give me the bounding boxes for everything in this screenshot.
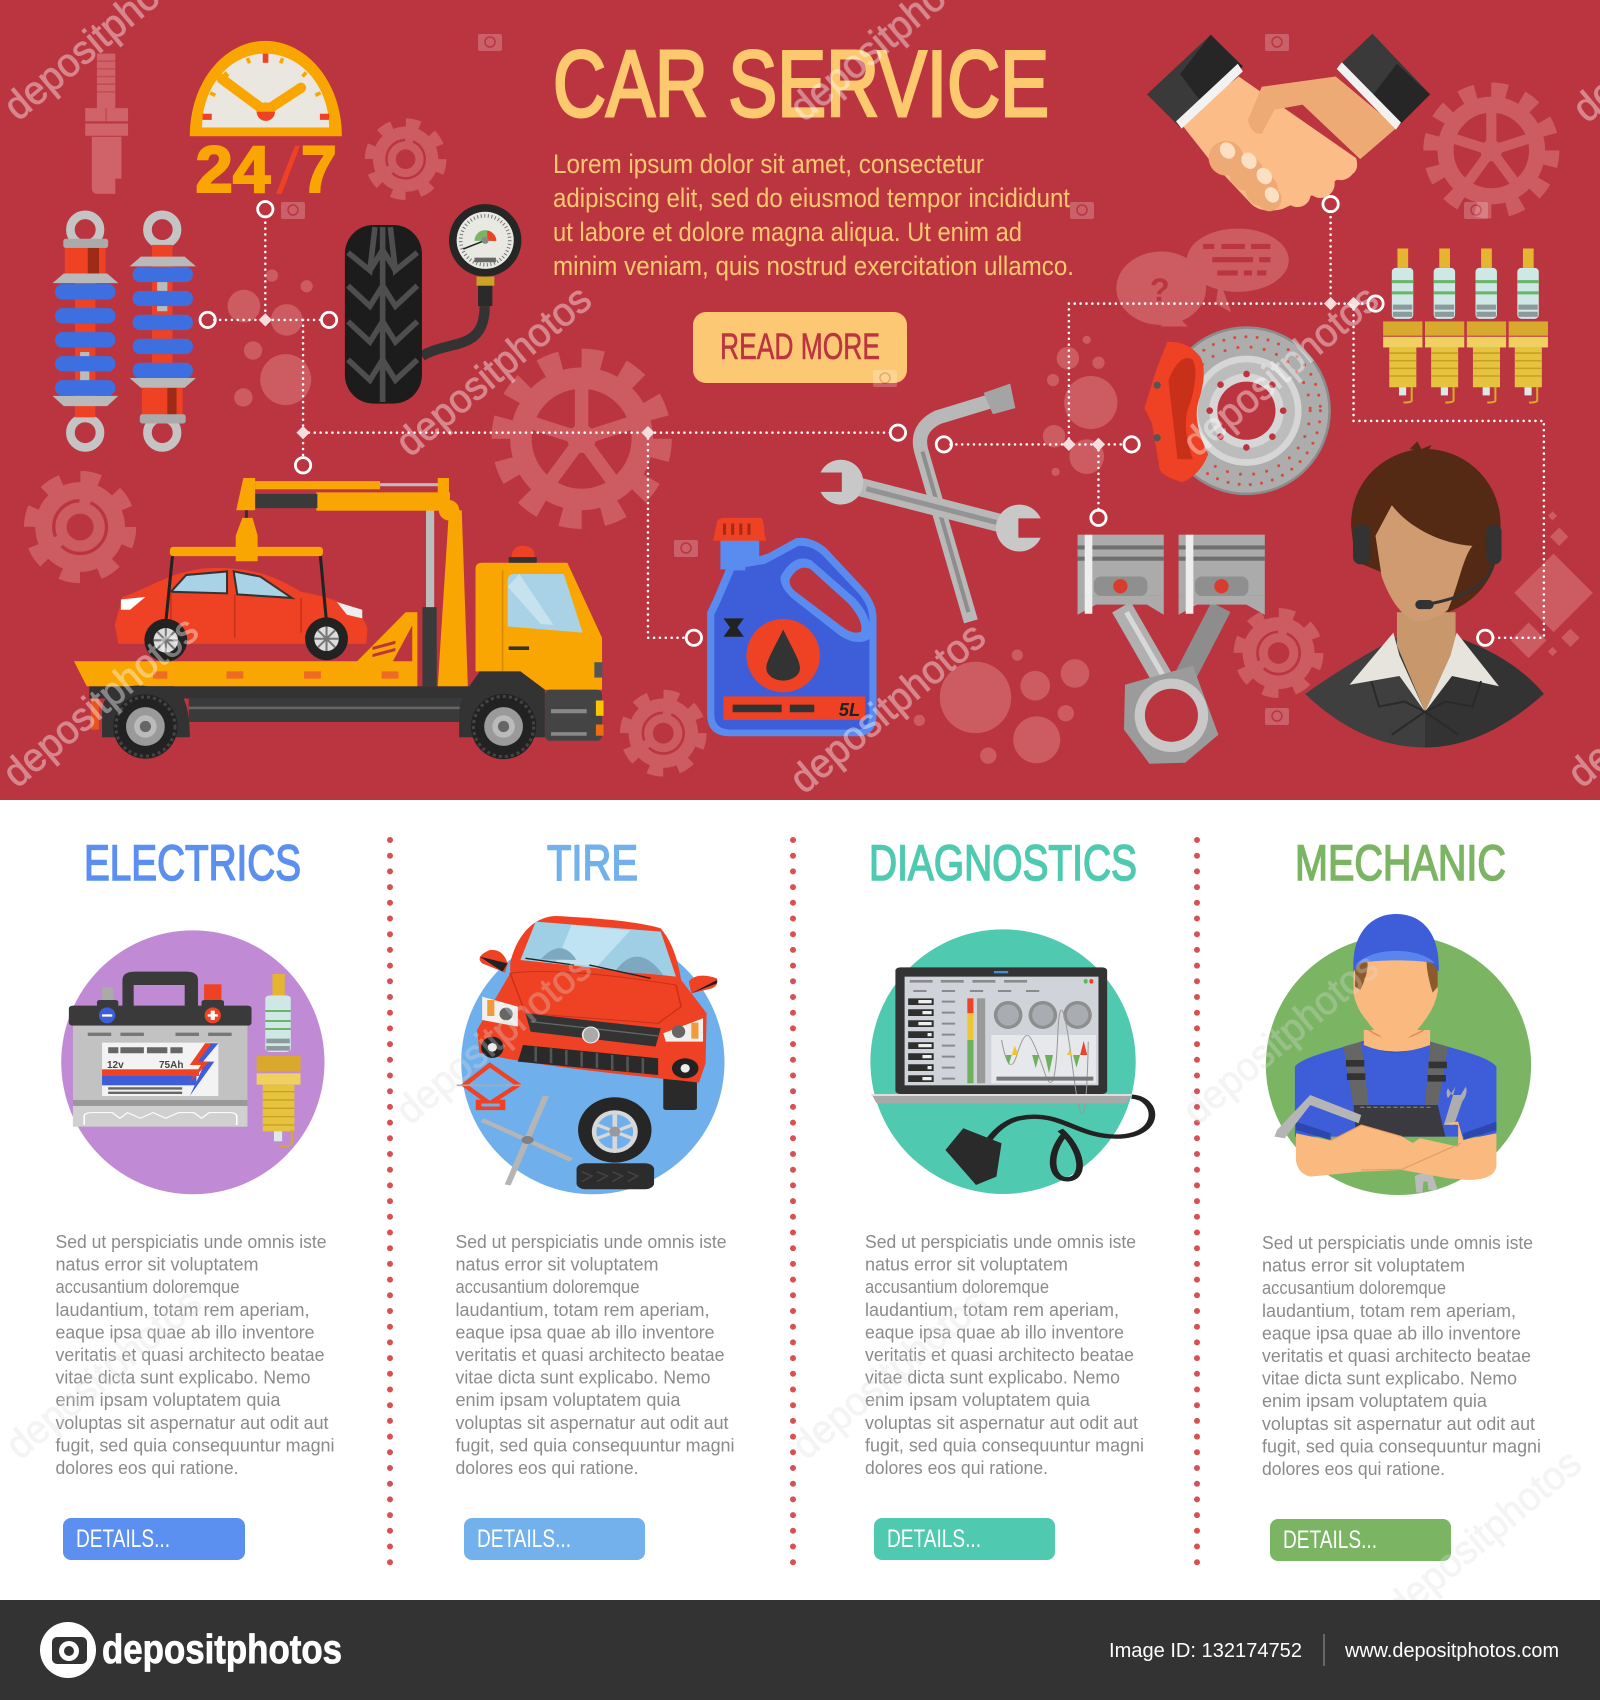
icon: shock absorbers: [53, 215, 196, 447]
electrics body text: eaque ipsa quae ab illo inventore: [56, 1322, 314, 1342]
electrics body text: dolores eos qui ratione.: [56, 1458, 238, 1478]
mechanic body text: Sed ut perspiciatis unde omnis iste: [1262, 1233, 1533, 1253]
battery rating labels: 75Ah: [159, 1060, 183, 1071]
mechanic body text: voluptas sit aspernatur aut odit aut: [1262, 1414, 1535, 1434]
tire body text: fugit, sed quia consequuntur magni: [456, 1435, 734, 1455]
icon: 24/7 clock: 24: [195, 133, 271, 207]
mechanic body text: dolores eos qui ratione.: [1262, 1459, 1445, 1479]
icon: handshake: [1147, 34, 1430, 211]
watermarks on the red panel: depositphotos: [1175, 277, 1387, 465]
faint watermarks on the white panel: depositphotos: [784, 1280, 996, 1468]
divider: [1324, 1634, 1325, 1666]
icon: tire and pressure gauge: [345, 204, 521, 404]
faint watermarks on the white panel: depositphotos: [0, 1280, 210, 1468]
faint watermarks on the white panel: [0, 945, 1590, 1629]
tire body text: Sed ut perspiciatis unde omnis iste: [456, 1232, 726, 1252]
icon: battery and spark plug: [61, 930, 324, 1194]
faint watermarks on the white panel: depositphotos: [1175, 945, 1387, 1133]
panel: dark footer: [0, 1600, 1600, 1700]
tire body text: voluptas sit aspernatur aut odit aut: [456, 1413, 728, 1433]
panel: white lower section: [0, 800, 1600, 1600]
electrics details button: DETAILS...: [76, 1525, 170, 1553]
diagnostics body text: accusantium doloremque: [865, 1277, 1049, 1297]
icon: 24/7 clock: [190, 41, 342, 207]
electrics body text: natus error sit voluptatem: [56, 1255, 258, 1275]
icon: call-centre operator: [1305, 441, 1544, 747]
mechanic body text: accusantium doloremque: [1262, 1278, 1446, 1298]
depositphotos logo: [40, 1622, 342, 1678]
diagnostics details button: [874, 1518, 1055, 1560]
faint watermarks on the white panel: depositphotos: [388, 945, 600, 1133]
intro paragraph: [553, 149, 1074, 281]
mechanic details button: DETAILS...: [1283, 1526, 1377, 1554]
diagnostics body text: natus error sit voluptatem: [865, 1255, 1068, 1275]
mechanic body text: enim ipsam voluptatem quia: [1262, 1391, 1488, 1411]
electrics body text: Sed ut perspiciatis unde omnis iste: [56, 1232, 326, 1252]
icon: diagnostic laptop and cable: [870, 929, 1152, 1194]
watermarks on the red panel: depositphotos: [388, 277, 600, 465]
battery rating labels: [107, 1060, 183, 1071]
heading: diagnostics: DIAGNOSTICS: [869, 835, 1137, 891]
tire body text: vitae dicta sunt explicabo. Nemo: [456, 1368, 710, 1388]
electrics body text: fugit, sed quia consequuntur magni: [56, 1435, 334, 1455]
tire body text: veritatis et quasi architecto beatae: [456, 1345, 724, 1365]
diagnostics details button: DETAILS...: [887, 1525, 981, 1553]
electrics body text: [56, 1232, 334, 1478]
mechanic body text: vitae dicta sunt explicabo. Nemo: [1262, 1369, 1517, 1389]
decorative gears, bubbles and faint icons: [31, 54, 1593, 771]
electrics body text: enim ipsam voluptatem quia: [56, 1390, 281, 1410]
battery rating labels: 12v: [107, 1060, 124, 1071]
decorative gears, bubbles and faint icons: ?: [1150, 271, 1170, 308]
diagnostics body text: [865, 1232, 1144, 1478]
icon: brake disc and caliper: [1144, 328, 1330, 494]
diagnostics body text: laudantium, totam rem aperiam,: [865, 1300, 1119, 1320]
icon: motor oil canister: [707, 518, 877, 736]
panel: red hero background: [0, 0, 1600, 800]
intro paragraph: adipiscing elit, sed do eiusmod tempor incididunt: [553, 183, 1070, 213]
mechanic body text: [1262, 1233, 1541, 1479]
tire body text: eaque ipsa quae ab illo inventore: [456, 1322, 714, 1342]
watermarks on the red panel: [0, 0, 1600, 802]
tire details button: [464, 1518, 645, 1560]
heading: electrics: ELECTRICS: [84, 835, 301, 891]
electrics body text: accusantium doloremque: [56, 1277, 240, 1297]
mechanic body text: natus error sit voluptatem: [1262, 1256, 1465, 1276]
depositphotos logo: depositphotos: [102, 1626, 342, 1672]
intro paragraph: minim veniam, quis nostrud exercitation ullamco.: [553, 251, 1074, 281]
icon: four spark plugs: [1383, 248, 1548, 403]
electrics body text: veritatis et quasi architecto beatae: [56, 1345, 324, 1365]
tire body text: laudantium, totam rem aperiam,: [456, 1300, 710, 1320]
mechanic details button: [1270, 1519, 1451, 1561]
icon: motor oil canister: 5L: [839, 699, 860, 720]
dotted column separators: [390, 840, 1197, 1568]
watermarks on the red panel: depositphotos: [782, 614, 994, 802]
diagnostics body text: dolores eos qui ratione.: [865, 1458, 1048, 1478]
intro paragraph: ut labore et dolore magna aliqua. Ut enim ad: [553, 217, 1022, 247]
read more button: READ MORE: [720, 326, 880, 367]
tire body text: natus error sit voluptatem: [456, 1255, 658, 1275]
electrics details button: [63, 1518, 245, 1560]
tire details button: DETAILS...: [477, 1525, 571, 1553]
mechanic body text: fugit, sed quia consequuntur magni: [1262, 1436, 1541, 1456]
mechanic body text: eaque ipsa quae ab illo inventore: [1262, 1323, 1521, 1343]
diagnostics body text: vitae dicta sunt explicabo. Nemo: [865, 1368, 1120, 1388]
icon: 24/7 clock: 7: [301, 133, 337, 207]
electrics body text: laudantium, totam rem aperiam,: [56, 1300, 310, 1320]
icon: tow truck with car: [74, 478, 604, 759]
tire body text: enim ipsam voluptatem quia: [456, 1390, 681, 1410]
mechanic body text: veritatis et quasi architecto beatae: [1262, 1346, 1531, 1366]
electrics body text: voluptas sit aspernatur aut odit aut: [56, 1413, 328, 1433]
tire body text: dolores eos qui ratione.: [456, 1458, 638, 1478]
icon: car on jack with tire: [457, 916, 724, 1194]
title: CAR SERVICE: [553, 31, 1049, 136]
watermarks on the red panel: depositphotos: [0, 608, 207, 796]
faint watermarks on the white panel: depositphotos: [1378, 1441, 1590, 1629]
image id: Image ID: 132174752: [1109, 1640, 1302, 1662]
read more button: [693, 312, 907, 383]
diagnostics body text: veritatis et quasi architecto beatae: [865, 1345, 1134, 1365]
intro paragraph: Lorem ipsum dolor sit amet, consectetur: [553, 149, 984, 179]
heading: tire: TIRE: [547, 835, 638, 891]
diagnostics body text: voluptas sit aspernatur aut odit aut: [865, 1413, 1138, 1433]
dotted connector network: [200, 196, 1544, 645]
website url: www.depositphotos.com: [1344, 1640, 1559, 1662]
diagnostics body text: Sed ut perspiciatis unde omnis iste: [865, 1232, 1136, 1252]
icon: mechanic with tools: [1266, 914, 1531, 1195]
tire body text: accusantium doloremque: [456, 1277, 640, 1297]
diagnostics body text: fugit, sed quia consequuntur magni: [865, 1435, 1144, 1455]
tire body text: [456, 1232, 734, 1478]
electrics body text: vitae dicta sunt explicabo. Nemo: [56, 1368, 310, 1388]
icon: crossed wrench and wheel key: [817, 384, 1044, 621]
icon: pistons: [1078, 535, 1265, 764]
heading: mechanic: MECHANIC: [1295, 835, 1506, 891]
mechanic body text: laudantium, totam rem aperiam,: [1262, 1301, 1516, 1321]
diagnostics body text: eaque ipsa quae ab illo inventore: [865, 1322, 1124, 1342]
diagnostics body text: enim ipsam voluptatem quia: [865, 1390, 1091, 1410]
